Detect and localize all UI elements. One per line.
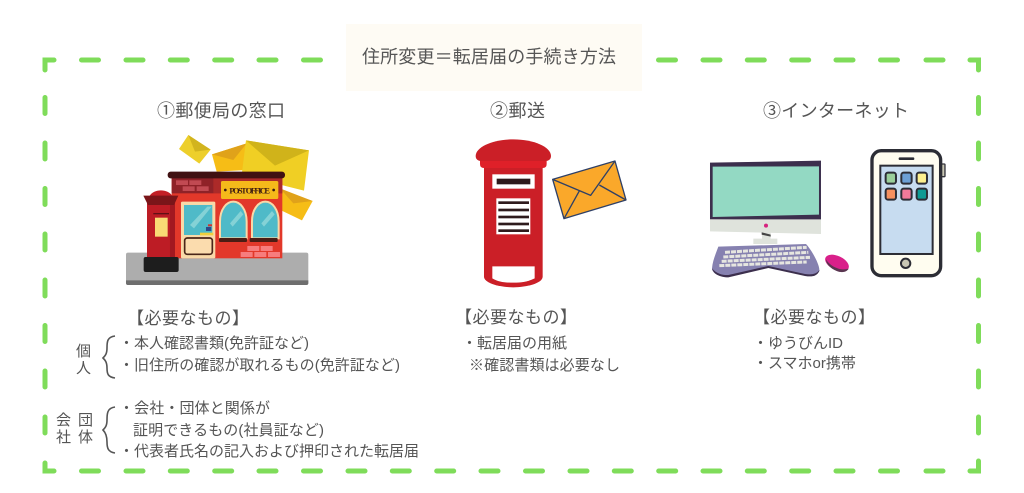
label: company: 体 xyxy=(78,429,93,446)
text block: requirements for mail xyxy=(455,308,620,374)
text block: requirements for post office: ・会社・団体と関係が xyxy=(119,400,270,417)
text block: requirements for internet xyxy=(753,308,875,372)
heading: internet: ③インターネット xyxy=(763,101,909,121)
text block: requirements for post office: 証明できるもの(社員証など) xyxy=(133,422,324,439)
label: company: 社 xyxy=(56,429,71,446)
label: company: 会 xyxy=(56,412,71,429)
icon: red post box xyxy=(476,139,551,287)
text block: requirements for post office xyxy=(56,309,419,460)
icon: post office: POST OFFICE xyxy=(229,186,270,195)
icon: desktop computer xyxy=(710,161,851,277)
text block: requirements for post office: ・代表者氏名の記入および押印された転居届 xyxy=(119,443,419,460)
label: company: 団 xyxy=(78,412,93,429)
text block: requirements for post office: 【必要なもの】 xyxy=(127,309,249,328)
text block: requirements for internet: ・ゆうびんID xyxy=(753,335,843,352)
text block: requirements for mail: ※確認書類は必要なし xyxy=(469,357,620,374)
text block: requirements for internet: ・スマホor携帯 xyxy=(753,355,856,372)
label: individual: 個 xyxy=(76,343,91,360)
icon: post office xyxy=(126,135,313,285)
title xyxy=(346,24,642,91)
text block: requirements for post office: ・旧住所の確認が取れるもの(免許証など) xyxy=(119,357,400,374)
label: company xyxy=(56,412,93,446)
text block: requirements for internet: 【必要なもの】 xyxy=(753,308,875,327)
icon: envelope xyxy=(553,161,626,219)
label: individual: 人 xyxy=(76,360,91,377)
heading: post office counter: ①郵便局の窓口 xyxy=(157,101,285,121)
title: 住所変更＝転居届の手続き方法 xyxy=(362,47,616,67)
label: individual xyxy=(76,343,91,377)
brace: company xyxy=(103,407,115,453)
text block: requirements for mail: 【必要なもの】 xyxy=(455,308,577,327)
heading: mail: ②郵送 xyxy=(490,101,545,121)
text block: requirements for mail: ・転居届の用紙 xyxy=(462,335,567,352)
icon: smartphone xyxy=(872,151,945,276)
text block: requirements for post office: ・本人確認書類(免許証など) xyxy=(119,335,309,352)
brace: individual xyxy=(103,336,115,378)
